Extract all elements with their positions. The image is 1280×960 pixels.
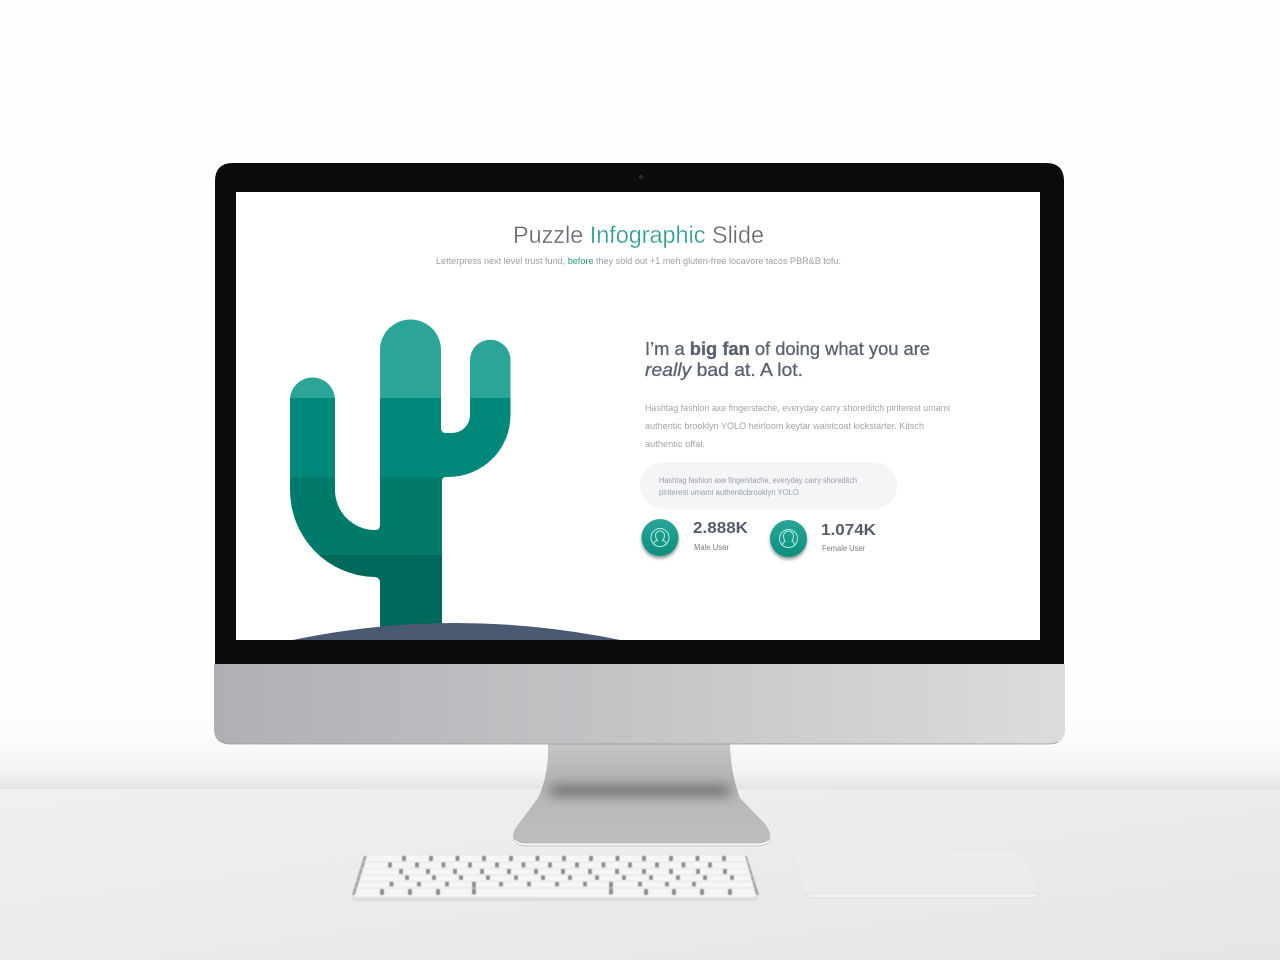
screen slide (236, 192, 1040, 645)
hill (288, 623, 625, 641)
monitor chin (214, 664, 1065, 744)
icon: female user (770, 520, 807, 560)
headline: I’m a big fan of doing what you are (645, 338, 930, 359)
stat: male user (642, 519, 748, 558)
cactus illustration (285, 315, 625, 645)
headline (645, 338, 930, 380)
callout pill: Hashtag fashion axe fingerstache, everyday carry shoreditch (659, 476, 857, 485)
icon: male user (642, 519, 678, 558)
stat: female user: Female User (822, 544, 865, 553)
stat: female user (770, 520, 876, 560)
subtitle: Letterpress next level trust fund, before they sold out +1 meh gluten-free locavore tacos PBR&B tofu. (436, 256, 841, 267)
body paragraph: Hashtag fashion axe fingerstache, everyday carry shoreditch pinterest umami (645, 403, 950, 413)
title: Puzzle Infographic Slide (513, 222, 764, 249)
keyboard (352, 856, 759, 901)
webcam (639, 175, 643, 179)
monitor stand (513, 744, 770, 846)
body paragraph: authentic offal. (645, 439, 705, 449)
body paragraph: authentic brooklyn YOLO heirloom keytar waistcoat kickstarter. Kitsch (645, 421, 924, 431)
stat: male user: 2.888K (693, 520, 748, 537)
callout pill: pinterest umami authenticbrooklyn YOLO. (659, 488, 801, 497)
body paragraph (645, 403, 950, 449)
callout pill (640, 462, 897, 509)
headline: really bad at. A lot. (645, 359, 803, 380)
desk surface (0, 789, 1280, 960)
monitor bezel (215, 163, 1064, 664)
trackpad (797, 853, 1038, 898)
stat: female user: 1.074K (821, 522, 876, 539)
stat: male user: Male User (694, 543, 729, 552)
